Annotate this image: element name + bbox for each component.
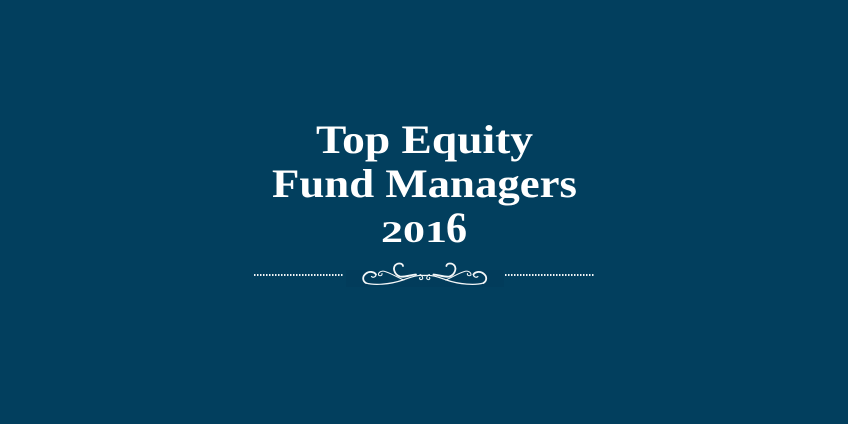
title line: Top Equity: Top Equity — [316, 117, 533, 162]
title line: 2016 — [381, 205, 467, 252]
title line: 2016: 6 — [446, 205, 467, 252]
left half of flourish — [363, 263, 425, 284]
icon: flourish ornament — [346, 263, 504, 287]
right half of flourish — [424, 263, 486, 284]
title line: 2016: 201 — [381, 214, 447, 249]
left dotted rule — [254, 274, 344, 276]
title line: Fund Managers: Fund Managers — [272, 161, 577, 206]
right dotted rule — [505, 274, 595, 276]
